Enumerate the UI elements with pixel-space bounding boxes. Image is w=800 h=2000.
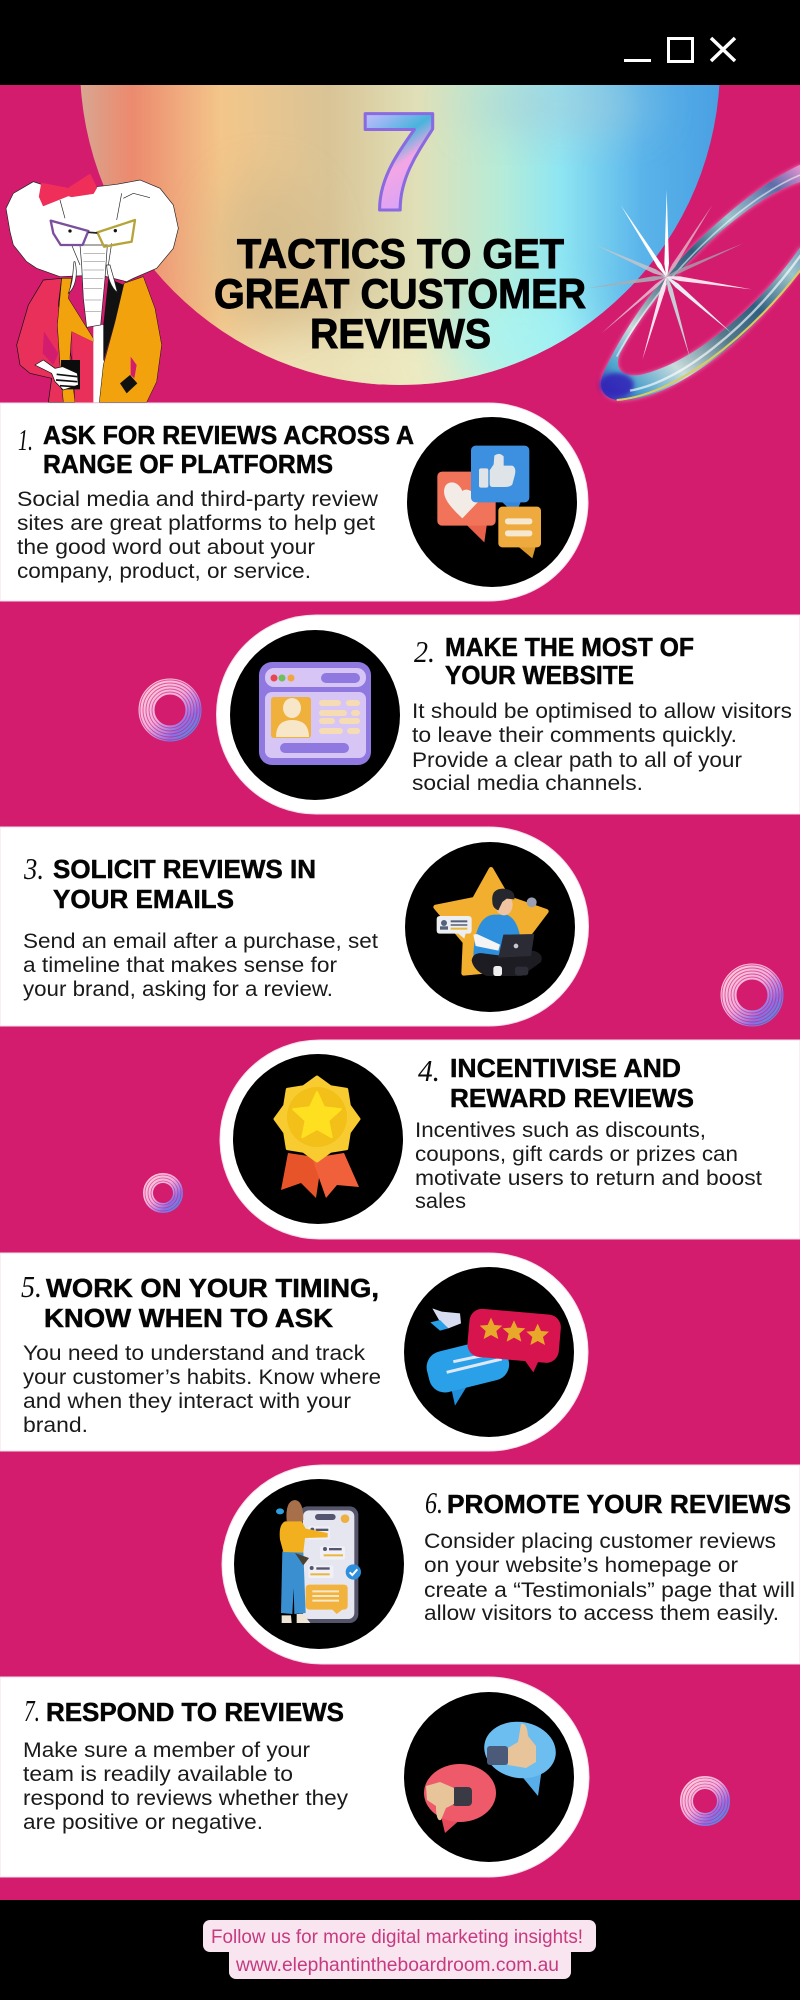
body text: social media channels. <box>412 772 643 795</box>
body text: on your website’s homepage or <box>424 1554 738 1577</box>
body text: You need to understand and track <box>23 1342 366 1365</box>
decorative ring 4 <box>682 1778 728 1824</box>
body text <box>412 700 792 795</box>
icon: woman with phone reviews <box>276 1500 361 1623</box>
number: 4. <box>418 1053 440 1088</box>
icon: social bubbles <box>437 446 541 558</box>
number: 5. <box>21 1269 42 1304</box>
website line: www.elephantintheboardroom.com.au <box>235 1955 559 1976</box>
icon: star rating bubbles <box>423 1308 562 1406</box>
ring body <box>601 164 800 400</box>
body text: Send an email after a purchase, set <box>23 930 378 953</box>
heading: PROMOTE YOUR REVIEWS <box>447 1489 791 1519</box>
body text: sites are great platforms to help get <box>17 512 375 535</box>
elephant character <box>6 174 178 402</box>
title: TACTICS TO GET <box>237 230 564 277</box>
body text: create a “Testimonials” page that will <box>424 1579 795 1602</box>
icon: award medal <box>275 1077 359 1198</box>
panel: tactic 3 <box>0 827 588 1026</box>
body text <box>23 1342 381 1437</box>
body text: It should be optimised to allow visitors <box>412 700 792 723</box>
heading: YOUR EMAILS <box>53 884 234 914</box>
tactic 4 icon badge <box>233 1054 403 1224</box>
numeral 7: 7 <box>359 83 439 240</box>
number: 1. <box>18 422 33 457</box>
decorative ring 3 <box>145 1175 181 1211</box>
panel: tactic 4 <box>220 1040 800 1239</box>
orange scarf <box>57 278 93 402</box>
number: 6. <box>425 1485 443 1520</box>
heading: SOLICIT REVIEWS IN <box>53 854 316 884</box>
heading: RANGE OF PLATFORMS <box>43 449 333 479</box>
heading: KNOW WHEN TO ASK <box>44 1303 333 1333</box>
panel: tactic 5 <box>0 1253 588 1451</box>
heading: RESPOND TO REVIEWS <box>46 1697 344 1727</box>
panel: tactic 2 <box>217 615 800 814</box>
phone and hand <box>61 360 80 389</box>
title: GREAT CUSTOMER <box>214 270 586 317</box>
icon: maximise <box>668 38 692 62</box>
body text <box>23 930 378 1001</box>
body text: a timeline that makes sense for <box>23 954 337 977</box>
black lapel <box>103 278 124 362</box>
body text <box>23 1739 349 1834</box>
heading: REWARD REVIEWS <box>450 1083 694 1113</box>
icon: person with star <box>436 869 546 976</box>
body text: Provide a clear path to all of your <box>412 749 742 772</box>
body text: respond to reviews whether they <box>23 1787 349 1810</box>
heading <box>43 420 414 479</box>
body text: Incentives such as discounts, <box>415 1119 706 1142</box>
body text: allow visitors to access them easily. <box>424 1602 779 1625</box>
ring glow <box>601 164 800 400</box>
heading <box>44 1273 379 1333</box>
panel: tactic 1 <box>0 403 588 601</box>
red jacket <box>17 278 75 402</box>
heading <box>445 632 694 690</box>
body text: Consider placing customer reviews <box>424 1530 776 1553</box>
panel: tactic 7 <box>0 1677 589 1877</box>
tactic 5 icon badge <box>404 1267 574 1437</box>
heading: ASK FOR REVIEWS ACROSS A <box>43 420 414 450</box>
body text: the good word out about your <box>17 536 315 559</box>
holographic ring and sparkle <box>586 164 800 400</box>
icon: thumbs bubbles <box>424 1716 560 1833</box>
icon: minimise <box>624 59 651 62</box>
panel: tactic 6 <box>222 1465 800 1664</box>
decorative ring 1 <box>140 680 200 740</box>
glasses <box>51 221 88 245</box>
number: 2. <box>414 634 435 669</box>
tactic 6 icon badge <box>234 1479 404 1649</box>
body text: and when they interact with your <box>23 1390 351 1413</box>
ears <box>6 180 178 282</box>
footer bar <box>0 1900 800 2000</box>
icon: website window <box>259 662 371 765</box>
tactic 1 icon badge <box>407 417 577 587</box>
tusks <box>68 262 117 293</box>
body text: team is readily available to <box>23 1763 293 1786</box>
title: REVIEWS <box>310 310 491 357</box>
number: 3. <box>23 851 44 886</box>
body text <box>424 1530 795 1625</box>
follow line: Follow us for more digital marketing insights! <box>211 1927 583 1948</box>
tactic 2 icon badge <box>230 630 400 800</box>
body text: are positive or negative. <box>23 1811 263 1834</box>
body text: motivate users to return and boost <box>415 1167 762 1190</box>
heading: MAKE THE MOST OF <box>445 632 694 662</box>
body text: Social media and third-party review <box>17 488 379 511</box>
body text: Make sure a member of your <box>23 1739 310 1762</box>
trunk <box>80 245 107 327</box>
body text: brand. <box>23 1414 88 1437</box>
hero circle <box>80 85 720 385</box>
body text: your customer’s habits. Know where <box>23 1366 381 1389</box>
white shirt <box>93 325 104 402</box>
title <box>214 230 586 357</box>
heading: INCENTIVISE AND <box>450 1053 681 1083</box>
number: 7. <box>24 1693 40 1728</box>
top window bar <box>0 0 800 85</box>
decorative ring 2 <box>722 965 782 1025</box>
tactic 7 icon badge <box>404 1692 574 1862</box>
body text <box>17 488 379 583</box>
tactic 3 icon badge <box>405 842 575 1012</box>
heading: WORK ON YOUR TIMING, <box>46 1273 379 1303</box>
body text: to leave their comments quickly. <box>412 724 737 747</box>
body text <box>415 1119 762 1213</box>
sparkle rays <box>586 190 752 361</box>
icon: close <box>711 38 735 61</box>
red bow <box>39 174 97 206</box>
heading <box>53 854 316 914</box>
body text: coupons, gift cards or prizes can <box>415 1143 738 1166</box>
body text: your brand, asking for a review. <box>23 978 333 1001</box>
orange jacket <box>99 277 162 402</box>
heading <box>450 1053 694 1113</box>
body text: sales <box>415 1190 466 1213</box>
body text: company, product, or service. <box>17 560 311 583</box>
footer label <box>203 1920 596 1979</box>
heading: YOUR WEBSITE <box>445 660 634 690</box>
